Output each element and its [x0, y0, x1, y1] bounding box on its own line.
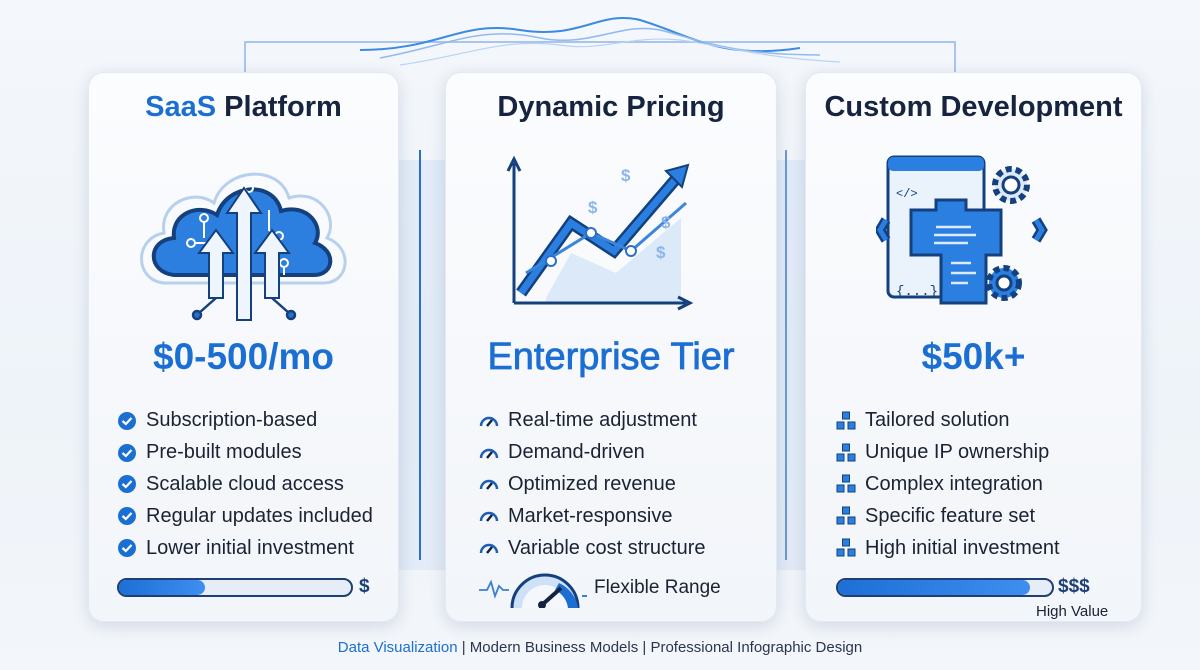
icon: rising price chart: $ [588, 198, 598, 217]
feature list [118, 409, 373, 559]
heading: Dynamic Pricing: Dynamic Pricing [497, 91, 725, 123]
feature list: Subscription-based [146, 409, 317, 431]
feature list: Real-time adjustment [508, 409, 697, 431]
tier label: Enterprise Tier [487, 336, 735, 378]
feature list: Tailored solution [865, 409, 1010, 431]
heading: Custom Development: Custom Development [824, 91, 1123, 123]
feature list: Lower initial investment [146, 537, 354, 559]
feature list: Unique IP ownership [865, 441, 1049, 463]
feature list: Demand-driven [508, 441, 645, 463]
progress bar: high cost [836, 578, 1054, 597]
panel: SaaS Platform [88, 72, 399, 622]
price: $0-500/mo [153, 336, 334, 377]
feature list [836, 409, 1060, 559]
heading: SaaS Platform: SaaS Platform [145, 91, 342, 123]
feature list: Market-responsive [508, 505, 673, 527]
decorative wave top [244, 17, 956, 72]
feature list: Pre-built modules [146, 441, 302, 463]
icon: code window with gears [876, 156, 1048, 304]
gauge: Flexible Range [479, 574, 721, 608]
icon: rising price chart: $ [656, 243, 666, 262]
feature list: Variable cost structure [508, 537, 706, 559]
footer caption: Data Visualization | Modern Business Models | Professional Infographic Design [338, 639, 862, 656]
label: High Value: High Value [1036, 603, 1108, 620]
label: $: $ [359, 576, 370, 597]
feature list: High initial investment [865, 537, 1060, 559]
progress bar: low cost [117, 578, 353, 597]
feature list: Specific feature set [865, 505, 1035, 527]
icon: rising price chart: $ [621, 166, 631, 185]
price: $50k+ [922, 336, 1025, 377]
icon: cloud with arrows [140, 172, 347, 321]
label: $$$: $$$ [1058, 576, 1090, 597]
feature list: Scalable cloud access [146, 473, 344, 495]
panel: Custom Development [805, 72, 1142, 622]
feature list: Regular updates included [146, 505, 373, 527]
panel: Dynamic Pricing [445, 72, 777, 622]
icon: rising price chart [506, 156, 694, 310]
icon: rising price chart: $ [661, 213, 671, 232]
icon: code window with gears: {...} [896, 284, 938, 300]
feature list: Complex integration [865, 473, 1043, 495]
feature list [480, 409, 706, 559]
gauge: Flexible Range: Flexible Range [594, 577, 721, 598]
feature list: Optimized revenue [508, 473, 676, 495]
icon: code window with gears: </> [896, 187, 918, 201]
